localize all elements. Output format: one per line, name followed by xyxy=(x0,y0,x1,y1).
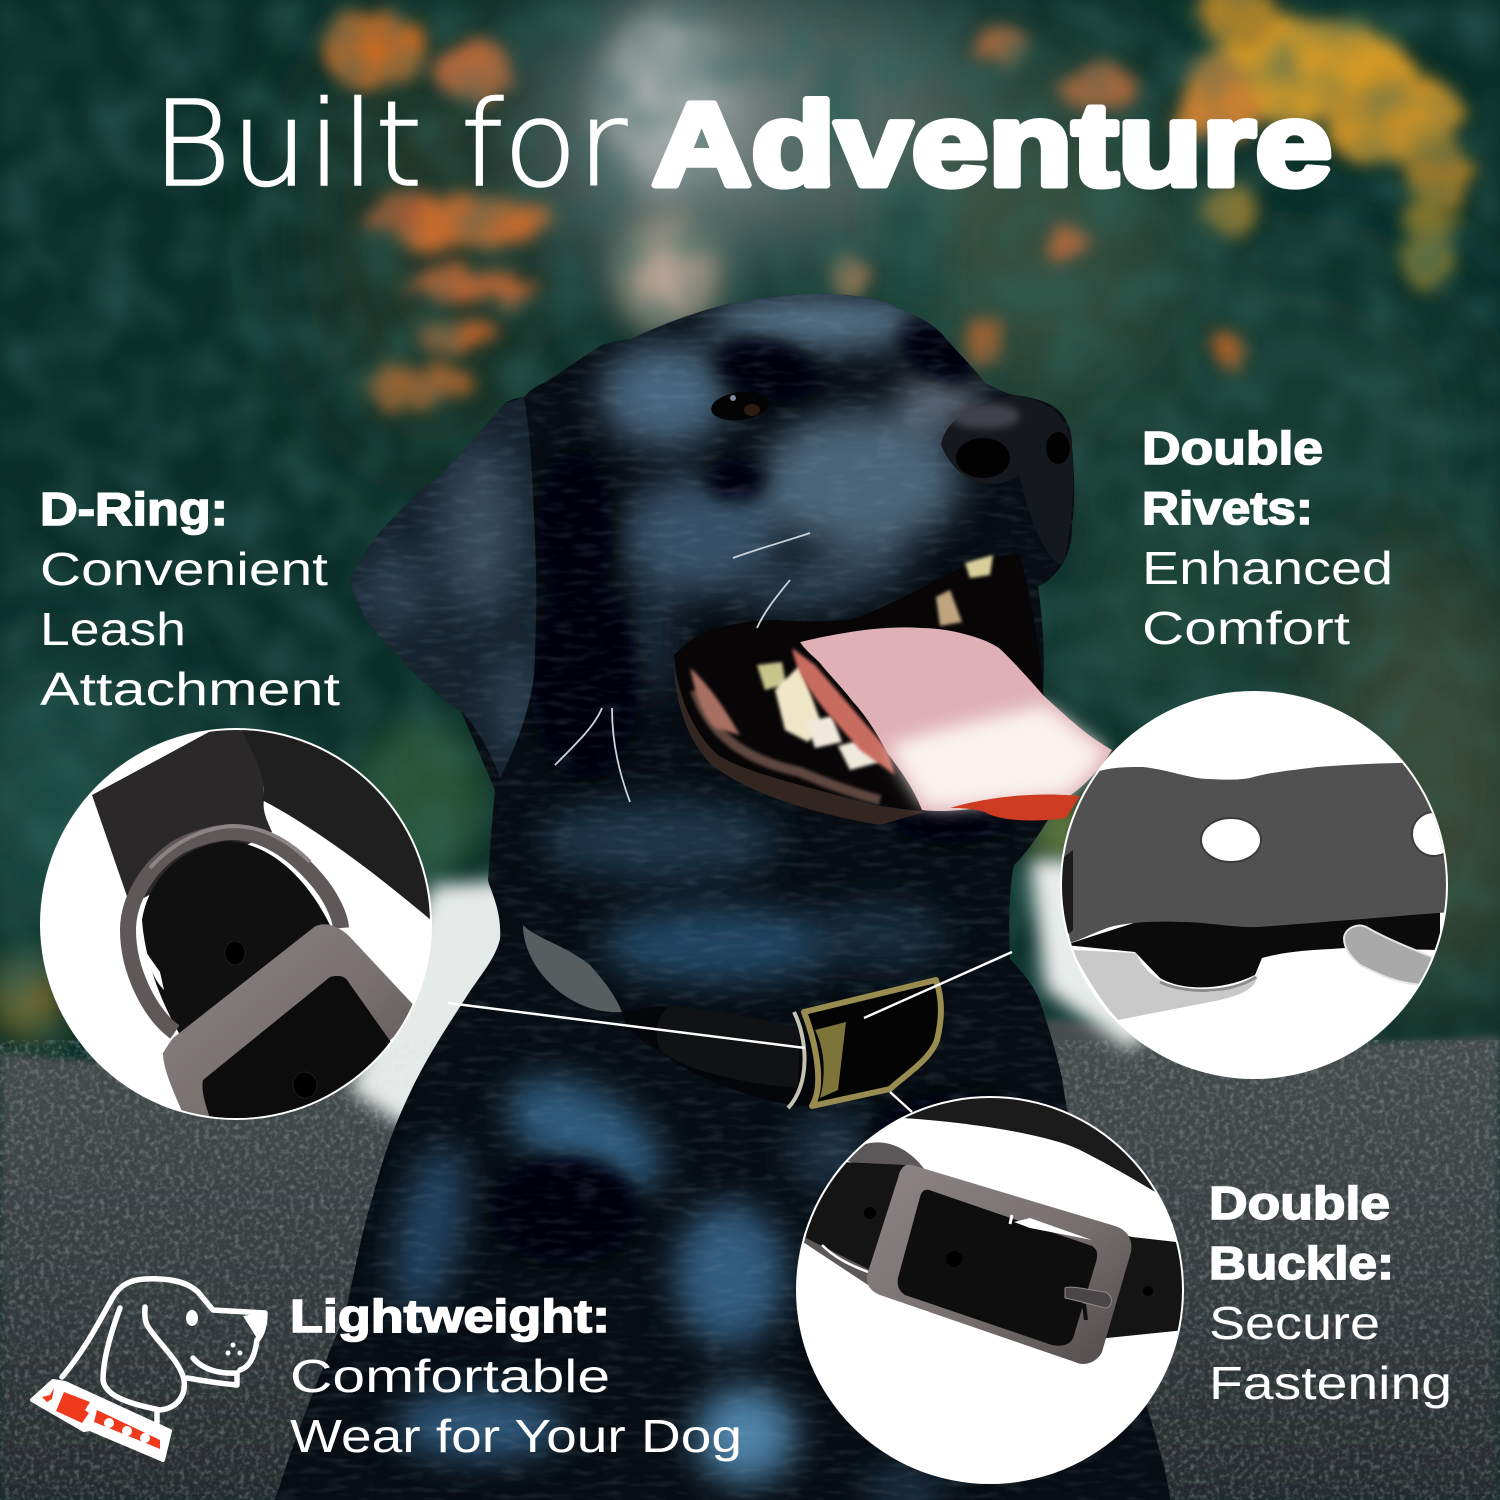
text block: double buckle: Secure xyxy=(1209,1297,1380,1349)
strap holes xyxy=(946,1251,962,1267)
text block: lightweight xyxy=(290,1290,742,1462)
text block: double rivets: Enhanced xyxy=(1142,542,1393,594)
text block: lightweight: Lightweight: xyxy=(290,1290,610,1342)
inner strap xyxy=(142,841,330,1035)
photo: black labrador xyxy=(270,290,1170,1500)
title: light part: Built for xyxy=(152,75,627,213)
text block: d-ring xyxy=(40,483,340,715)
tongue xyxy=(800,627,1112,811)
text block: double buckle xyxy=(1209,1177,1452,1409)
text block: d-ring: Leash xyxy=(40,603,186,655)
buckle opening xyxy=(898,1190,1097,1346)
rivet holes xyxy=(1201,818,1261,862)
text block: double buckle: Buckle: xyxy=(1209,1237,1394,1289)
tongue gum xyxy=(792,648,895,775)
gums xyxy=(690,668,740,735)
callout circle: double buckle xyxy=(796,1080,1185,1484)
text block: lightweight: Comfortable xyxy=(290,1350,610,1402)
collar strap xyxy=(622,985,940,1106)
back strap xyxy=(900,1080,1185,1193)
lower lip xyxy=(674,665,925,825)
text block: d-ring: Attachment xyxy=(40,663,340,715)
strap holes xyxy=(225,941,245,965)
d-ring xyxy=(128,832,341,1032)
silver clasp xyxy=(1344,926,1432,985)
dog eye xyxy=(709,388,771,424)
collar keeper xyxy=(657,1006,800,1088)
icon: dog with red collar xyxy=(32,1279,265,1460)
silver buckle fragment xyxy=(1072,950,1258,1020)
text block: d-ring: D-Ring: xyxy=(40,483,228,535)
text block: lightweight: Wear for Your Dog xyxy=(290,1410,742,1462)
text block: double rivets: Rivets: xyxy=(1142,482,1313,534)
lower strap xyxy=(1071,912,1440,988)
dog ear xyxy=(350,397,536,778)
text block: double rivets xyxy=(1142,422,1393,654)
grey collar band xyxy=(523,925,622,1012)
buckle frame xyxy=(867,1165,1131,1364)
text block: double buckle: Fastening xyxy=(1209,1357,1452,1409)
title: bold part: Adventure xyxy=(652,79,1332,211)
keeper loop xyxy=(163,924,413,1118)
callout lines xyxy=(448,952,1012,1112)
collar strap behind d-ring xyxy=(92,725,272,905)
whiskers xyxy=(555,533,810,802)
fur texture xyxy=(270,290,1170,1500)
text block: d-ring: Convenient xyxy=(40,543,328,595)
callout circle: d-ring xyxy=(40,725,450,1135)
tongue tip shadow xyxy=(950,794,1080,820)
dog mouth xyxy=(674,553,1067,812)
text block: double rivets: Double xyxy=(1142,422,1323,474)
buckle tongue xyxy=(1065,1287,1111,1308)
dark fur patches xyxy=(490,307,1050,1265)
dog nose xyxy=(941,395,1073,565)
icon: collar xyxy=(32,1381,170,1460)
buckle strap xyxy=(806,1162,1185,1350)
collar buckle xyxy=(804,980,941,1106)
rear ring xyxy=(800,1142,925,1285)
text block: double buckle: Double xyxy=(1209,1177,1390,1229)
callout circle: double rivets xyxy=(1060,691,1456,1079)
title xyxy=(152,75,1332,213)
teeth xyxy=(757,555,993,770)
rivet strap xyxy=(1060,760,1450,943)
text block: double rivets: Comfort xyxy=(1142,602,1350,654)
